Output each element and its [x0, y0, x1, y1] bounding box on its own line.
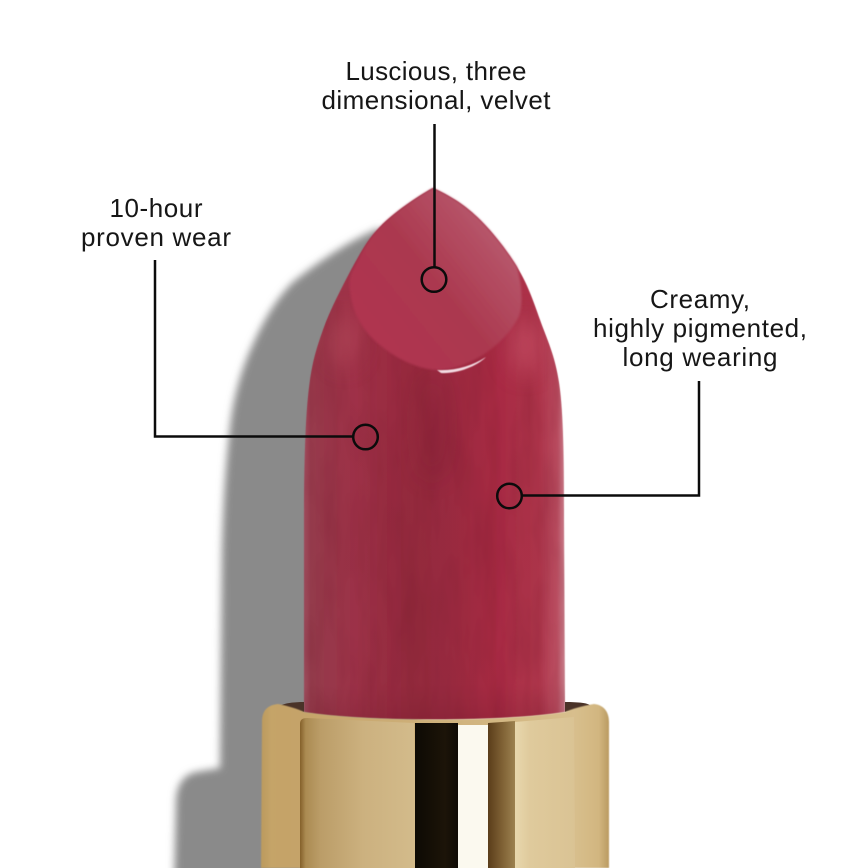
right shoulder glow [507, 322, 540, 368]
gloss highlight [437, 357, 486, 373]
callout: wear [81, 193, 378, 449]
right panel [515, 717, 575, 868]
callout text: proven wear [81, 222, 231, 252]
callout text: dimensional, velvet [322, 85, 551, 115]
mottled texture [300, 300, 570, 725]
callout text: Creamy, [650, 284, 750, 314]
white reflection band [458, 725, 488, 868]
lipstick product [300, 180, 570, 725]
marker [422, 267, 446, 292]
leader line [522, 381, 699, 496]
case opening rim [280, 702, 590, 712]
dark streak under cut face [418, 370, 446, 480]
callout: velvet [322, 56, 551, 292]
callout text: Luscious, three [346, 56, 526, 86]
lipstick bullet [304, 188, 565, 720]
callout: creamy [497, 284, 807, 508]
left panel [300, 718, 417, 868]
bullet shading and texture [300, 180, 570, 725]
drop shadow [174, 228, 420, 868]
leader line [155, 260, 353, 436]
marker [353, 425, 378, 449]
left shoulder glow [336, 328, 354, 352]
callout text: highly pigmented, [593, 313, 807, 343]
gold lipstick case [261, 702, 609, 868]
slanted cut face [350, 188, 521, 370]
leader line [433, 124, 436, 267]
callout text: long wearing [622, 342, 778, 372]
callout text: 10-hour [110, 193, 203, 223]
marker [497, 484, 522, 508]
dark reflection band [415, 723, 458, 868]
case outer body [261, 704, 609, 868]
brown reflection band [488, 721, 515, 868]
